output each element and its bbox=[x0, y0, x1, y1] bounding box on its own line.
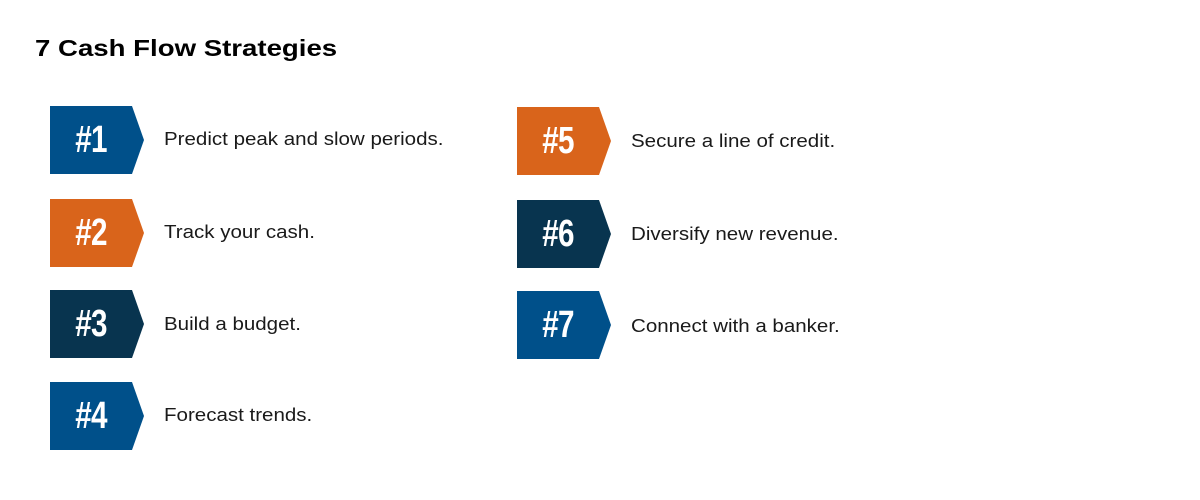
badge #4 bbox=[50, 382, 144, 450]
badge #7 bbox=[517, 291, 611, 359]
badge #6: #6 bbox=[542, 213, 574, 255]
badge #6 bbox=[517, 200, 611, 268]
badge #1 bbox=[50, 106, 144, 174]
text 6: Diversify new revenue. bbox=[631, 224, 839, 244]
title: 7 Cash Flow Strategies bbox=[35, 35, 337, 61]
badge #2: #2 bbox=[75, 212, 107, 254]
text 5: Secure a line of credit. bbox=[631, 131, 835, 151]
badge #7: #7 bbox=[542, 304, 574, 346]
badge #3 bbox=[50, 290, 144, 358]
text 7: Connect with a banker. bbox=[631, 316, 840, 336]
badge #4: #4 bbox=[75, 395, 107, 437]
text 3: Build a budget. bbox=[164, 314, 301, 334]
badge #5: #5 bbox=[542, 120, 574, 162]
text 4: Forecast trends. bbox=[164, 405, 312, 425]
text 2: Track your cash. bbox=[164, 222, 315, 242]
text 1: Predict peak and slow periods. bbox=[164, 129, 443, 149]
badge #5 bbox=[517, 107, 611, 175]
badge #2 bbox=[50, 199, 144, 267]
badge #1: #1 bbox=[75, 119, 107, 161]
badge #3: #3 bbox=[75, 303, 107, 345]
